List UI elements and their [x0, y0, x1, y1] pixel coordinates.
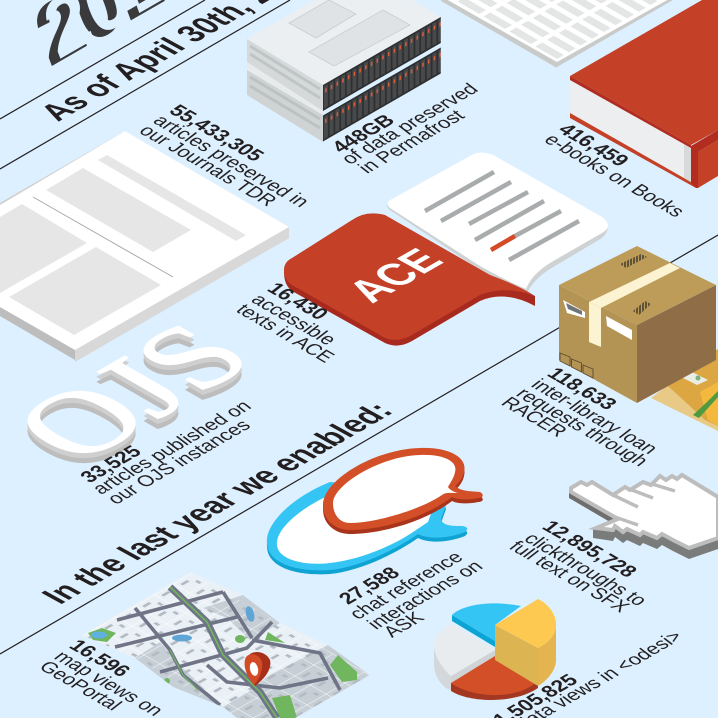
caption: RACER: RACER [496, 394, 571, 441]
caption: GeoPortal: 16,596 [64, 637, 134, 681]
caption: ACE: accessible [246, 291, 340, 349]
caption: Books: 416,459 [553, 121, 633, 170]
caption: SFX: clickthroughs to [519, 530, 651, 610]
caption: ASK: interactions on [363, 558, 488, 633]
icon: city map [82, 572, 370, 718]
yellow slice [495, 599, 556, 686]
caption: RACER: requests through [511, 385, 652, 470]
roads [115, 587, 340, 718]
icon: OJS letters: J [61, 351, 222, 444]
caption: Books: e-books on Books [539, 131, 689, 221]
icon: small parcel [651, 349, 718, 431]
caption: SFX: full text on SFX [504, 538, 633, 616]
icon: red book [570, 0, 718, 188]
label: ACE: ACE [337, 242, 454, 309]
red slice [451, 656, 538, 700]
icon: OJS letters: S [103, 315, 282, 419]
icon: server Permafrost [247, 0, 441, 142]
caption: GeoPortal: map views on [49, 648, 167, 718]
icon: OJS letters: S [103, 305, 282, 409]
heading: last year: In the last year we enabled: [33, 397, 401, 609]
caption: TDR: 55,433,305 [164, 102, 268, 165]
map pin [245, 652, 270, 686]
parks and lakes [88, 605, 357, 718]
caption: ASK: chat reference [345, 549, 468, 623]
caption: SFX: 12,895,728 [537, 518, 641, 581]
icon: newspaper OJS journal page [0, 131, 289, 362]
blue slice [452, 603, 521, 647]
icon: pie chart [434, 599, 556, 700]
icon: OJS letters [0, 305, 282, 489]
caption: RACER: 118,633 [542, 365, 621, 414]
caption: TDR: our Journals TDR [134, 122, 281, 210]
caption: OJS: 33,525 [76, 442, 146, 487]
icon: ACE book [284, 152, 608, 346]
grey slice [434, 624, 495, 690]
caption: RACER: inter-library loan [526, 376, 662, 458]
icon: OJS letters: J [61, 341, 222, 434]
caption: Permafrost: of data preserved [337, 80, 483, 168]
icon: cardboard box [559, 246, 716, 403]
icon: pixel hand cursor [569, 475, 718, 559]
icon: keyboard [430, 0, 673, 68]
caption: ASK: 27,588 [334, 564, 405, 608]
icon: chat bubbles [267, 448, 483, 574]
caption: OJS: articles published on [88, 398, 256, 498]
caption: Permafrost: in Permafrost [354, 107, 470, 177]
red bubble [323, 448, 483, 534]
caption: ASK: ASK [379, 609, 429, 641]
caption: OJS: our OJS instances [103, 417, 256, 508]
icon: OJS letters: J [61, 346, 222, 439]
blue bubble [267, 482, 467, 574]
caption: RACER [496, 365, 662, 470]
icon: OJS letters: S [103, 310, 282, 414]
caption: GeoPortal: GeoPortal [34, 658, 126, 714]
caption: TDR: articles preserved in [148, 112, 313, 211]
caption: Permafrost: 448GB [327, 111, 400, 157]
caption: ASK [334, 549, 488, 641]
caption: ACE: 16,430 [262, 280, 332, 324]
caption: ACE: texts in ACE [231, 301, 338, 366]
